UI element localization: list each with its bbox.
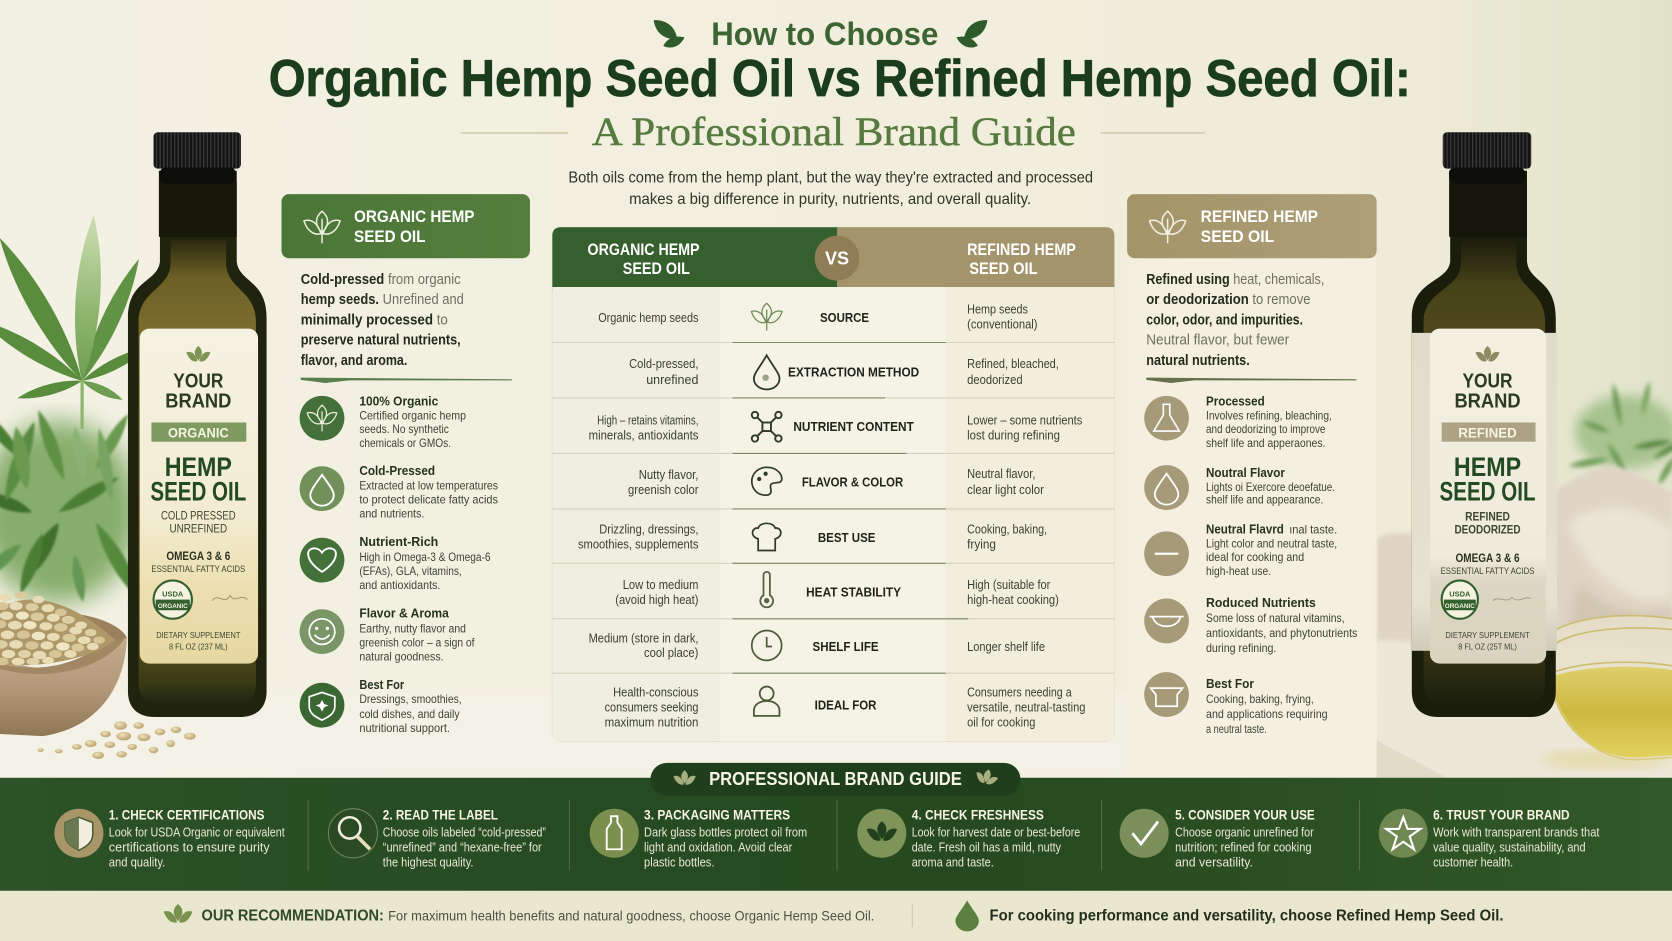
description xyxy=(1146,271,1324,369)
feature: neutral flavor: Neutral Flavrd xyxy=(1206,521,1284,536)
tip 5: consider your use xyxy=(1120,806,1315,869)
greenery xyxy=(1568,380,1672,487)
feature: 100% organic: Certified organic hemp xyxy=(359,408,466,422)
feature: cold-pressed xyxy=(300,463,498,520)
description: or deodorization to remove xyxy=(1146,291,1311,308)
tip 5: consider your use: nutrition; refined for cooking xyxy=(1175,839,1312,854)
label: organic bottle xyxy=(140,329,258,664)
label: refined bottle: OMEGA 3 & 6 xyxy=(1456,552,1520,565)
feature: cold-pressed: to protect delicate fatty acids xyxy=(359,493,498,507)
row: heat stability: High (suitable for xyxy=(967,577,1051,592)
row: best use: smoothies, supplements xyxy=(578,536,698,551)
feature: flavor and aroma: Flavor & Aroma xyxy=(359,606,449,621)
feature: best for: Cooking, baking, frying, xyxy=(1206,692,1314,706)
icon: leaf right xyxy=(956,20,987,48)
tip 4: check freshness: date. Fresh oil has a mild, nutty xyxy=(912,839,1062,854)
label: organic bottle: BRAND xyxy=(165,391,231,413)
label: organic bottle: YOUR xyxy=(173,370,224,392)
icon: oil drop xyxy=(955,900,979,931)
description: natural nutrients. xyxy=(1146,352,1250,369)
tip 6: trust your brand: Work with transparent brands that xyxy=(1433,824,1600,839)
label: refined bottle: REFINED xyxy=(1465,511,1510,524)
feature: processed: and deodorizing to improve xyxy=(1206,422,1326,436)
row: ideal for: Health-conscious xyxy=(613,685,698,700)
feature: best for: a neutral taste. xyxy=(1206,722,1267,736)
panel header: SEED OIL xyxy=(1201,227,1274,246)
tip 2: read the label: Choose oils labeled “cold-pressed” xyxy=(383,824,546,839)
heading: main title: Organic Hemp Seed Oil vs Refined Hemp Seed Oil: xyxy=(269,50,1411,108)
feature: processed: Processed xyxy=(1206,393,1265,408)
badge: USDA seal refined: USDA xyxy=(1449,589,1471,598)
table header: ORGANIC HEMP xyxy=(588,240,700,259)
feature: nutrient-rich: High in Omega-3 & Omega-6 xyxy=(359,550,491,564)
feature: 100% organic: 100% Organic xyxy=(359,393,439,408)
badge: USDA seal refined: ORGANIC xyxy=(1445,603,1475,610)
feature: 100% organic xyxy=(300,393,466,450)
scattered seeds xyxy=(37,721,196,759)
row: shelf life: Medium (store in dark, xyxy=(589,630,698,645)
row: best use xyxy=(578,521,1047,551)
feature: noutral flavor: Noutral Flavor xyxy=(1206,465,1285,480)
strip: our recommendation: For cooking performance and versatility, choose Refined Hemp Seed Oil. xyxy=(990,908,1504,925)
row: nutrient content: Lower – some nutrients xyxy=(967,413,1082,428)
description: Neutral flavor, but fewer xyxy=(1146,332,1289,349)
row: flavor and color xyxy=(628,466,1045,497)
row: best use: Drizzling, dressings, xyxy=(599,521,698,536)
row: extraction method: Refined, bleached, xyxy=(967,356,1059,371)
feature: cold-pressed: Extracted at low temperatures xyxy=(359,479,498,493)
row: shelf life: Longer shelf life xyxy=(967,639,1045,654)
feature: reduced nutrients: antioxidants, and phytonutrients xyxy=(1206,626,1357,640)
label: organic bottle: UNREFINED xyxy=(170,522,227,535)
feature: reduced nutrients: Some loss of natural vitamins, xyxy=(1206,611,1345,625)
tip 1: check certifications: and quality. xyxy=(109,854,165,869)
row: nutrient content: lost during refining xyxy=(967,428,1060,443)
table header xyxy=(552,227,1114,287)
row: flavor and color: greenish color xyxy=(628,482,699,497)
row: source: Hemp seeds xyxy=(967,302,1028,317)
row: source: Organic hemp seeds xyxy=(598,310,698,325)
feature: processed: shelf life and apperaones. xyxy=(1206,436,1325,450)
row: ideal for: consumers seeking xyxy=(605,700,698,715)
comparison table xyxy=(552,227,1114,741)
feature: neutral flavor: ideal for cooking and xyxy=(1206,550,1304,564)
feature: noutral flavor: shelf life and appearance. xyxy=(1206,493,1323,507)
row: flavor and color: Nutty flavor, xyxy=(639,467,698,482)
row: nutrient content xyxy=(589,412,1082,443)
tip 4: check freshness: aroma and taste. xyxy=(912,854,994,869)
row: shelf life: SHELF LIFE xyxy=(813,639,879,654)
row: flavor and color: FLAVOR & COLOR xyxy=(802,475,903,490)
label: organic bottle: 8 FL OZ (237 ML) xyxy=(169,642,228,652)
badge: USDA seal refined xyxy=(1442,580,1478,619)
tip 3: packaging matters xyxy=(590,806,807,869)
label: organic bottle: HEMP xyxy=(165,452,232,482)
feature: best for: nutritional support. xyxy=(359,721,450,735)
panel header xyxy=(282,194,530,258)
vs badge xyxy=(815,236,859,281)
label: refined bottle: YOUR xyxy=(1462,370,1513,392)
intro text: Both oils come from the hemp plant, but the way they're extracted and processed xyxy=(568,169,1093,186)
feature: flavor and aroma: greenish color – a sign of xyxy=(359,636,475,650)
tip 1: check certifications: certifications to ensure purity xyxy=(109,839,270,854)
feature: noutral flavor xyxy=(1144,465,1335,510)
heading: subtitle: A Professional Brand Guide xyxy=(592,109,1076,154)
feature: neutral flavor: Light color and neutral taste, xyxy=(1206,536,1337,550)
intro text: makes a big difference in purity, nutrients, and overall quality. xyxy=(629,191,1031,208)
feature: 100% organic: seeds. No synthetic xyxy=(359,422,449,436)
row: heat stability: HEAT STABILITY xyxy=(806,584,901,599)
tip 2: read the label: 2. READ THE LABEL xyxy=(383,806,498,822)
cannabis leaf xyxy=(0,214,151,429)
feature: flavor and aroma: natural goodness. xyxy=(359,649,444,663)
row: nutrient content: NUTRIENT CONTENT xyxy=(793,419,914,434)
pill: professional brand guide: PROFESSIONAL BRAND GUIDE xyxy=(709,769,962,789)
tip 1: check certifications xyxy=(54,806,285,869)
strip: our recommendation: For maximum health benefits and natural goodness, choose Organic Hemp Seed Oil. xyxy=(388,908,874,924)
row: source: SOURCE xyxy=(820,310,869,325)
description: color, odor, and impurities. xyxy=(1146,311,1303,328)
feature: flavor and aroma: Earthy, nutty flavor and xyxy=(359,622,466,636)
panel header: ORGANIC HEMP xyxy=(354,207,475,226)
tip 5: consider your use: and versatility. xyxy=(1175,854,1253,869)
description: minimally processed to xyxy=(301,311,448,328)
label: refined bottle: ESSENTIAL FATTY ACIDS xyxy=(1441,566,1534,576)
panel header: SEED OIL xyxy=(354,227,425,246)
feature: nutrient-rich: Nutrient-Rich xyxy=(359,534,438,549)
description xyxy=(301,271,464,369)
tip 6: trust your brand: customer health. xyxy=(1433,854,1513,869)
intro text xyxy=(568,169,1093,208)
row: ideal for: Consumers needing a xyxy=(967,685,1072,700)
tip 1: check certifications: 1. CHECK CERTIFICATIONS xyxy=(109,806,264,822)
tip 3: packaging matters: 3. PACKAGING MATTERS xyxy=(644,806,790,822)
label: organic bottle: ESSENTIAL FATTY ACIDS xyxy=(151,564,245,574)
bush foliage xyxy=(0,406,148,605)
feature: best for: Best For xyxy=(359,677,404,692)
label: organic bottle: COLD PRESSED xyxy=(161,510,236,523)
pill: professional brand guide xyxy=(650,763,1020,796)
row: ideal for: oil for cooking xyxy=(967,715,1035,730)
badge: USDA seal xyxy=(154,580,192,619)
row: extraction method: Cold-pressed, xyxy=(629,356,698,371)
row: ideal for: versatile, neutral-tasting xyxy=(967,700,1086,715)
row: source: (conventional) xyxy=(967,317,1038,332)
row: best use: Cooking, baking, xyxy=(967,521,1047,536)
feature: best for: and applications requiring xyxy=(1206,707,1328,721)
label: refined bottle: SEED OIL xyxy=(1440,476,1536,506)
tip 6: trust your brand: 6. TRUST YOUR BRAND xyxy=(1433,806,1570,822)
feature: cold-pressed: Cold-Pressed xyxy=(359,463,435,478)
photo: glass bowl of oil xyxy=(1541,616,1672,769)
feature: nutrient-rich: and antioxidants. xyxy=(359,578,440,592)
row: flavor and color: clear light color xyxy=(967,482,1045,497)
row: flavor and color: Neutral flavor, xyxy=(967,466,1035,481)
row: heat stability: (avoid high heat) xyxy=(615,592,698,607)
vs badge: VS xyxy=(825,249,849,269)
row: heat stability: Low to medium xyxy=(623,577,698,592)
feature: 100% organic: chemicals or GMOs. xyxy=(359,436,451,450)
feature: best for xyxy=(1144,672,1328,736)
feature: reduced nutrients xyxy=(1144,595,1357,655)
label: refined bottle: DIETARY SUPPLEMENT xyxy=(1445,630,1530,640)
row: nutrient content: High – retains vitamins, xyxy=(597,413,698,428)
label: refined bottle: DEODORIZED xyxy=(1454,523,1521,536)
badge: USDA seal: USDA xyxy=(162,589,184,598)
row: nutrient content: minerals, antioxidants xyxy=(589,428,698,443)
row: extraction method: EXTRACTION METHOD xyxy=(788,365,919,380)
description: hemp seeds. Unrefined and xyxy=(301,291,464,308)
table header: SEED OIL xyxy=(969,259,1038,278)
label: organic bottle: DIETARY SUPPLEMENT xyxy=(156,630,240,640)
table header: REFINED HEMP xyxy=(967,240,1076,259)
tip 2: read the label: “unrefined” and “hexane-free” for xyxy=(383,839,542,854)
feature: best for: cold dishes, and daily xyxy=(359,707,460,721)
label: refined bottle: BRAND xyxy=(1454,391,1521,413)
label: refined bottle: REFINED xyxy=(1458,424,1517,440)
description: Cold-pressed from organic xyxy=(301,271,461,288)
feature: flavor and aroma xyxy=(300,606,475,663)
row: extraction method: deodorized xyxy=(967,372,1023,387)
row: shelf life: cool place) xyxy=(644,645,698,660)
row: shelf life xyxy=(589,630,1045,660)
panel: refined hemp seed oil xyxy=(1127,194,1377,778)
feature: noutral flavor: Lights oi Exercore deoefatue. xyxy=(1206,480,1335,494)
strip: our recommendation: OUR RECOMMENDATION: xyxy=(202,908,384,925)
row: extraction method: unrefined xyxy=(646,372,698,387)
feature: nutrient-rich: (EFAs), GLA, vitamins, xyxy=(359,564,462,578)
badge: USDA seal: ORGANIC xyxy=(158,603,188,610)
panel: organic hemp seed oil xyxy=(282,194,530,735)
table header: SEED OIL xyxy=(623,259,690,278)
row: heat stability xyxy=(615,572,1059,607)
feature: neutral flavor: high-heat use. xyxy=(1206,564,1271,578)
bottle: organic left xyxy=(128,132,267,717)
row: heat stability: high-heat cooking) xyxy=(967,592,1059,607)
cloth xyxy=(1377,466,1672,651)
seeds in bowl xyxy=(0,591,105,665)
feature: best for xyxy=(300,677,462,735)
panel header: REFINED HEMP xyxy=(1201,207,1318,226)
feature: reduced nutrients: during refining. xyxy=(1206,641,1276,655)
description: flavor, and aroma. xyxy=(301,352,407,369)
row: ideal for: maximum nutrition xyxy=(605,715,698,730)
label: refined bottle xyxy=(1430,329,1546,664)
feature: neutral flavor xyxy=(1144,521,1337,578)
label: organic bottle: SEED OIL xyxy=(150,476,246,506)
tip 4: check freshness: 4. CHECK FRESHNESS xyxy=(912,806,1044,822)
icon: leaf left xyxy=(654,20,685,48)
feature: best for: Dressings, smoothies, xyxy=(359,692,462,706)
feature: neutral flavor: ınal taste. xyxy=(1289,522,1337,536)
tip 6: trust your brand xyxy=(1379,806,1600,869)
tip 3: packaging matters: light and oxidation. Avoid clear xyxy=(644,839,793,854)
row: best use: BEST USE xyxy=(818,530,876,545)
label: refined bottle: HEMP xyxy=(1454,452,1521,482)
row: ideal for: IDEAL FOR xyxy=(815,697,877,712)
heading: how to choose: How to Choose xyxy=(711,16,938,52)
label: organic bottle: OMEGA 3 & 6 xyxy=(166,550,231,563)
tip 2: read the label xyxy=(328,806,546,869)
tip 3: packaging matters: plastic bottles. xyxy=(644,854,714,869)
row: source xyxy=(598,302,1038,332)
photo: bowl of hemp seeds xyxy=(0,591,196,759)
tip 3: packaging matters: Dark glass bottles protect oil from xyxy=(644,824,807,839)
band: buying tips xyxy=(0,778,1672,891)
description: Refined using heat, chemicals, xyxy=(1146,271,1324,288)
panel header xyxy=(1127,194,1377,258)
label: refined bottle: 8 FL OZ (25T ML) xyxy=(1458,642,1517,652)
feature: processed xyxy=(1144,393,1332,450)
title block xyxy=(269,16,1411,208)
photo: hemp plant left xyxy=(0,214,151,605)
tip 5: consider your use: Choose organic unrefined for xyxy=(1175,824,1314,839)
strip: our recommendation xyxy=(0,891,1672,941)
feature: best for: Best For xyxy=(1206,676,1254,691)
tip 4: check freshness xyxy=(857,806,1080,869)
photo: greenery, cloth and surface right xyxy=(0,380,1672,778)
feature: reduced nutrients: Roduced Nutrients xyxy=(1206,595,1316,610)
row: best use: frying xyxy=(967,536,996,551)
feature: nutrient-rich xyxy=(300,534,491,592)
tip 4: check freshness: Look for harvest date or best-before xyxy=(912,824,1080,839)
row: ideal for xyxy=(605,685,1086,730)
row: extraction method xyxy=(629,355,1059,389)
tip 2: read the label: the highest quality. xyxy=(383,854,473,869)
feature: cold-pressed: and nutrients. xyxy=(359,506,424,520)
feature: processed: Involves refining, bleaching, xyxy=(1206,408,1332,422)
tip 1: check certifications: Look for USDA Organic or equivalent xyxy=(109,824,285,839)
tip 6: trust your brand: value quality, sustainability, and xyxy=(1433,839,1586,854)
tip 5: consider your use: 5. CONSIDER YOUR USE xyxy=(1175,806,1315,822)
label: organic bottle: ORGANIC xyxy=(168,424,229,440)
bottle: refined right xyxy=(1412,132,1557,717)
description: preserve natural nutrients, xyxy=(301,332,461,349)
